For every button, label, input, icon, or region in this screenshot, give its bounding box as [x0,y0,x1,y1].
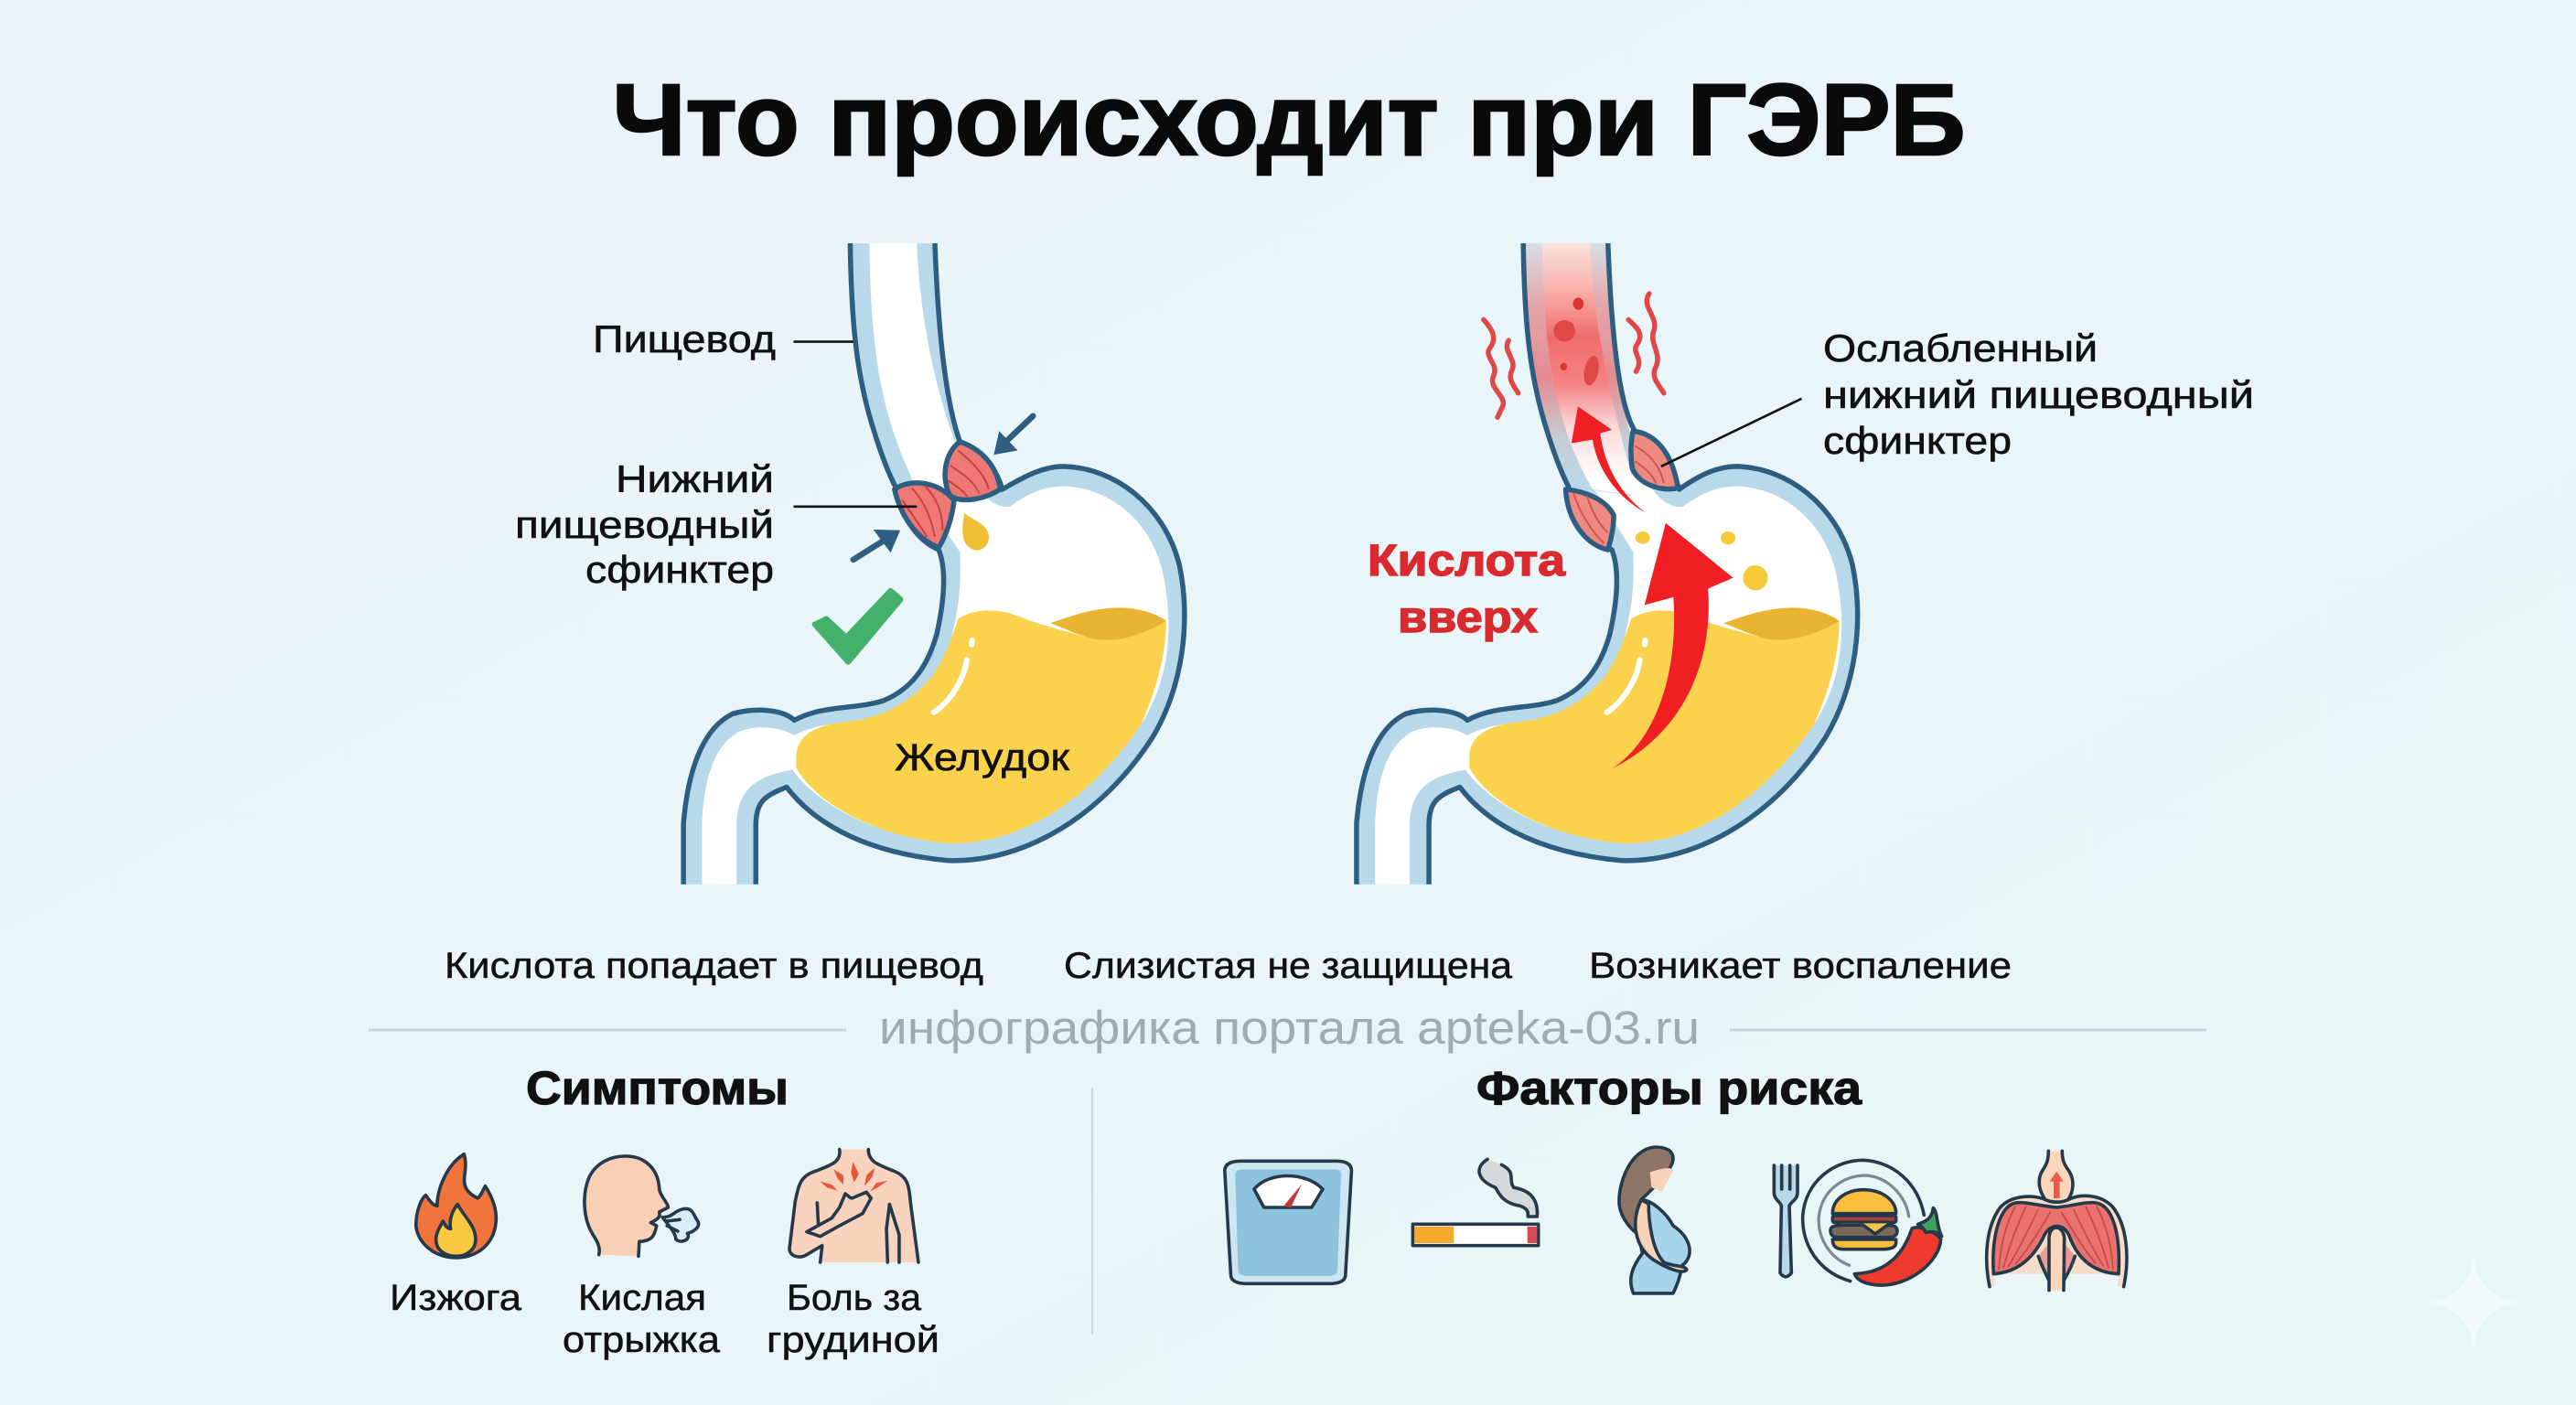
caption row [445,946,2012,986]
icon: chest pain [789,1150,918,1262]
symptom labels: Изжога [390,1278,522,1318]
arrow: acid reflux large [1612,523,1733,768]
caption row: Возникает воспаление [1589,946,2012,986]
arrow: acid reflux small [1572,406,1647,513]
arrow: sphincter closing, lower [853,530,900,560]
leader line [1661,399,1801,467]
leader lines [794,342,917,507]
icon: fork, plate, burger, chili [1774,1160,1942,1285]
label: weakened sphincter: Ослабленный [1823,327,2098,370]
stomach wall [683,243,1185,885]
corner sparkle [2430,1259,2517,1346]
label: weakened sphincter: сфинктер [1823,419,2012,462]
symptom labels: грудиной [767,1320,939,1360]
icons: scale, cigarette, pregnant woman [1225,1147,1690,1293]
stomach outline [1357,243,1858,885]
symptom icons [416,1150,918,1262]
label: esophagus: Пищевод [593,317,776,360]
stomach outline [683,243,1185,885]
acid droplet [962,513,989,551]
icon: head with acid belch [585,1156,699,1256]
diagram: healthy stomach [683,243,1185,885]
symptom labels: отрыжка [563,1320,721,1360]
acid droplets [1636,531,1767,590]
stomach body [1357,243,1858,885]
symptom labels [390,1278,939,1360]
label: acid goes up: Кислота [1368,537,1565,585]
diagram: GERD stomach [1357,243,1858,885]
irritation squiggles [1484,294,1664,417]
symptom labels: Кислая [578,1278,706,1318]
watermark with rules [369,1002,2206,1054]
watermark with rules: инфографика портала apteka-03.ru [879,1002,1700,1054]
label: acid goes up [1368,537,1565,642]
label: lower esophageal sphincter: сфинктер [585,548,774,591]
heading: risk factors: Факторы риска [1476,1062,1862,1114]
title: Что происходит при ГЭРБ [613,64,1965,177]
icon: scales [1225,1161,1351,1283]
label: stomach: Желудок [895,735,1070,778]
icon: hiatal hernia [1987,1151,2127,1291]
symptom labels: Боль за [787,1278,922,1318]
acid wave [1050,607,1166,640]
label: acid goes up: вверх [1398,594,1538,642]
inflamed esophagus [1523,243,1637,496]
stomach acid [796,610,1166,843]
label: weakened sphincter [1823,327,2254,462]
highlights [934,640,972,713]
label: weakened sphincter: нижний пищеводный [1823,373,2254,416]
check mark [815,591,901,662]
caption row: Кислота попадает в пищевод [445,946,983,986]
weakened sphincter [1565,431,1678,550]
icon: cigarette [1412,1159,1539,1246]
risk factor icons [1225,1147,2127,1293]
label: lower esophageal sphincter: пищеводный [515,503,774,546]
closed sphincter [895,442,1001,548]
section divider [1091,1089,1093,1334]
arrow: sphincter closing, upper [993,416,1033,455]
label: lower esophageal sphincter: Нижний [616,457,774,500]
stomach lumen [702,243,1168,885]
icon: flame [416,1154,496,1258]
icon: pregnant woman [1619,1147,1690,1293]
caption row: Слизистая не защищена [1064,946,1513,986]
heading: symptoms: Симптомы [526,1062,789,1114]
label: lower esophageal sphincter [515,457,774,591]
